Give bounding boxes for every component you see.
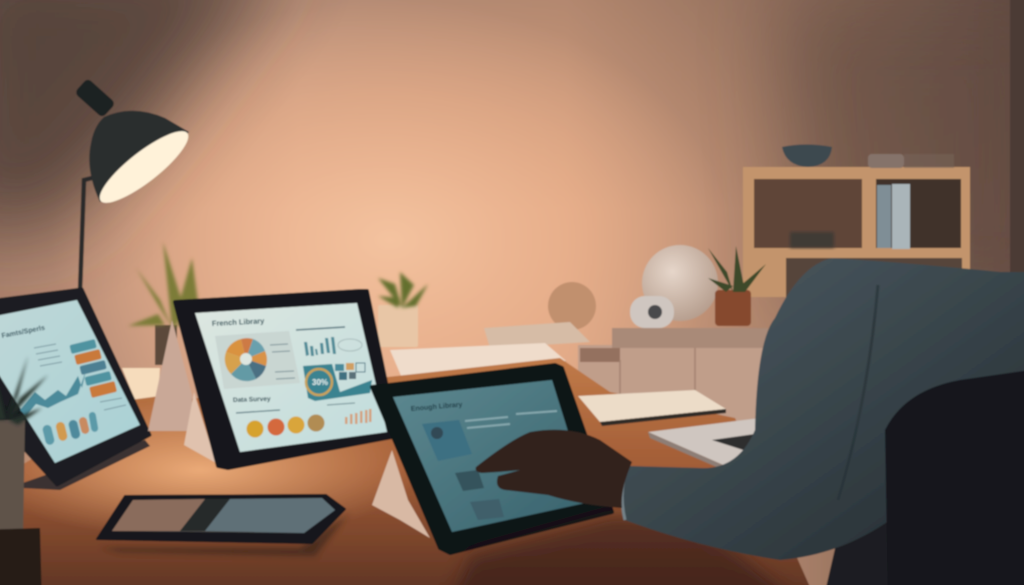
front tablet screen (393, 380, 590, 532)
back plant left (128, 242, 216, 365)
right foreground desk shadow (450, 515, 800, 585)
main tablet screen (195, 303, 387, 452)
shirt cuff (622, 466, 628, 520)
front tablet picture (422, 420, 472, 461)
lamp (74, 78, 197, 292)
front tablet (372, 365, 612, 553)
lamp stem (80, 178, 92, 292)
spheres and decor on counter (548, 245, 718, 330)
chair frame below the arm (822, 490, 900, 585)
lamp glow on desk (0, 400, 420, 540)
stand of main tablet (148, 320, 216, 463)
person back and arm (621, 258, 1024, 560)
left tablet heading: Famts/Sperls (1, 325, 46, 340)
lamp light (91, 121, 197, 213)
pie panel (215, 331, 300, 389)
left tablet stand foot (20, 440, 150, 490)
flat tablet screen reflection (112, 498, 335, 533)
laptop (648, 418, 764, 472)
survey badges (246, 414, 324, 438)
front tablet text lines (465, 411, 557, 428)
front tablet stand (372, 450, 430, 538)
desk (0, 358, 818, 585)
lamp shade (89, 111, 189, 202)
lamp knob (74, 78, 116, 118)
right plant (708, 246, 766, 326)
teal stat card: 30% (312, 378, 328, 387)
front tablet thumbnails (455, 470, 484, 491)
left tablet capsules (42, 411, 99, 446)
bar chart bottom (345, 409, 372, 424)
teal stat card (303, 363, 372, 401)
front tablet heading: Enough Library (411, 402, 463, 413)
left tablet screen (0, 300, 140, 463)
bar chart top (304, 337, 336, 356)
boxes in shelf (790, 232, 834, 248)
foreground plant and pot (0, 352, 48, 585)
main tablet heading: French Library (212, 316, 265, 328)
flat tablet on desk (97, 495, 350, 556)
data survey heading: Data Survey (233, 396, 271, 404)
left tablet area chart (20, 370, 86, 416)
left tablet (0, 289, 150, 485)
bowl and items on top of shelf (782, 144, 954, 168)
left tablet text lines (34, 344, 126, 410)
binders on shelf (877, 184, 910, 249)
floor-standing lower cabinet (578, 328, 773, 435)
papers on desk (390, 322, 590, 382)
shelving unit (743, 167, 970, 298)
notebook (578, 390, 726, 426)
chair (885, 368, 1024, 585)
left tablet buttons (69, 339, 117, 398)
cream paper behind left tablet (122, 368, 160, 400)
middle plant (378, 272, 428, 347)
main tablet (175, 291, 397, 468)
hand (476, 430, 632, 508)
